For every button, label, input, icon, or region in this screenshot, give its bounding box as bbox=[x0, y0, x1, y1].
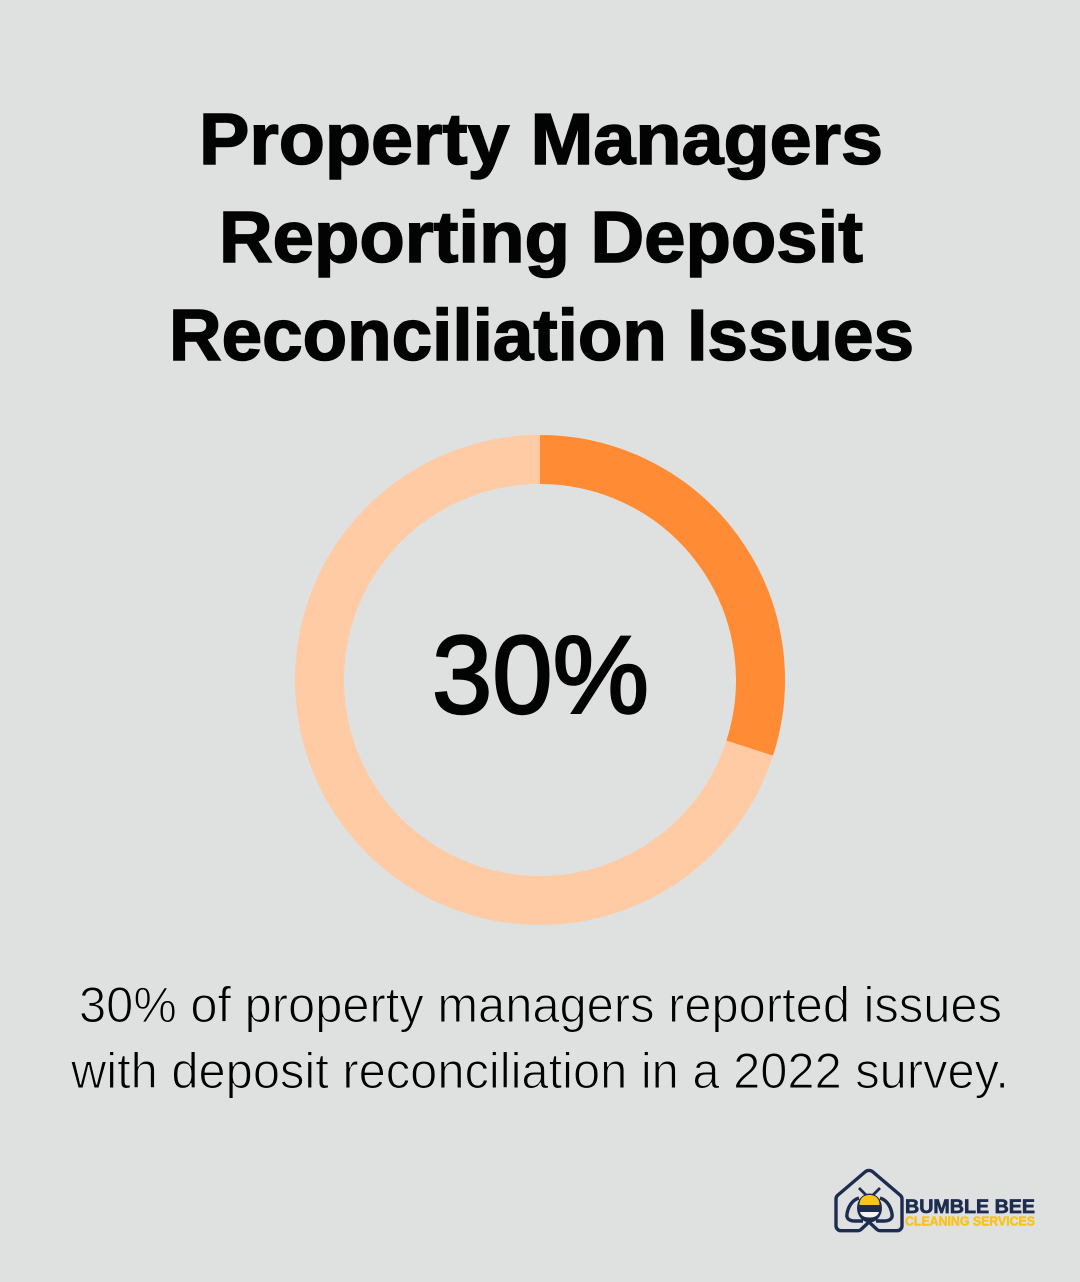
title: Reporting Deposit bbox=[219, 198, 863, 278]
title: Property Managers bbox=[199, 100, 883, 180]
donut chart: 30% bbox=[320, 460, 760, 900]
description text: 30% of property managers reported issues bbox=[79, 977, 1002, 1033]
logo: Bumble Bee Cleaning Services bbox=[836, 1170, 1035, 1231]
description text bbox=[70, 977, 1009, 1099]
logo tagline: CLEANING SERVICES bbox=[905, 1214, 1035, 1228]
logo wordmark: BUMBLE BEE bbox=[905, 1196, 1035, 1218]
donut centre value: 30% bbox=[432, 614, 649, 737]
title bbox=[169, 100, 914, 376]
icon: house with bee bbox=[836, 1170, 902, 1231]
description text: with deposit reconciliation in a 2022 survey. bbox=[70, 1043, 1009, 1099]
title: Reconciliation Issues bbox=[169, 296, 914, 376]
